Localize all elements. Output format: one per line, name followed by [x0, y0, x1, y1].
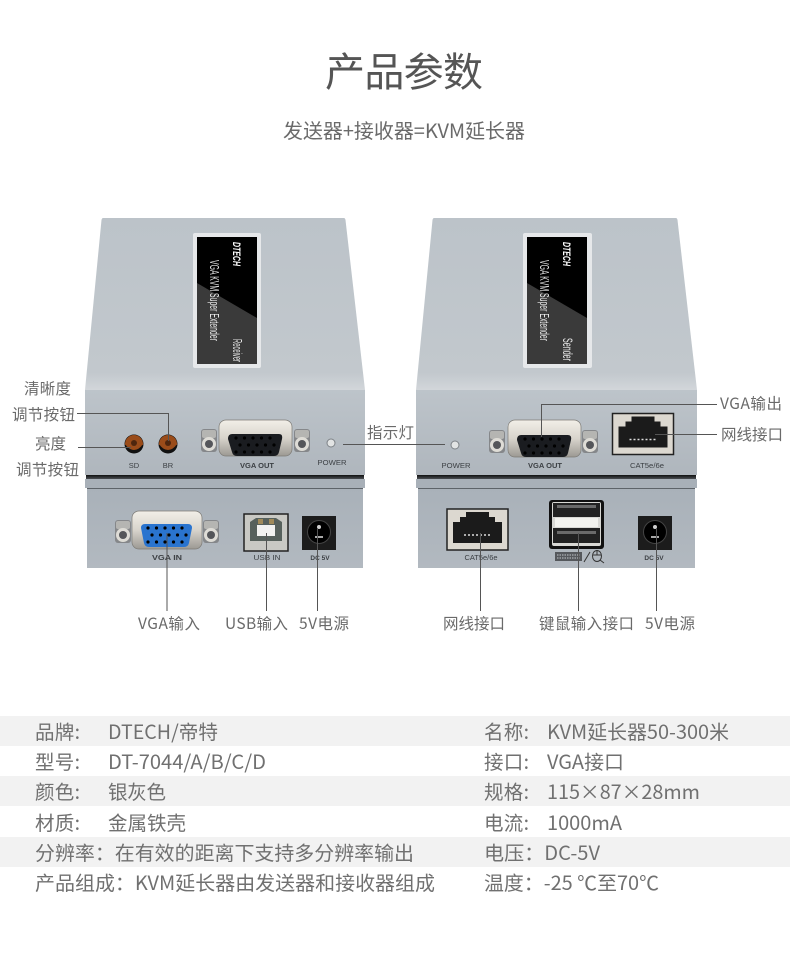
callout: network port (back): 网线接口	[443, 612, 505, 634]
row 6	[35, 867, 659, 896]
RJ45 port	[612, 414, 674, 470]
sender top face	[416, 218, 697, 390]
callout: 5V power sender	[645, 528, 695, 634]
callout: network port (back)	[443, 533, 505, 634]
callout: keyboard mouse input: 键鼠输入接口	[539, 612, 634, 634]
subtitle: 发送器+接收器=KVM延长器	[283, 115, 525, 144]
row 3: 规格:	[484, 776, 529, 805]
row 5: 电压：DC-5V	[484, 837, 601, 866]
sender unit	[416, 218, 697, 568]
row 2: DT-7044/A/B/C/D	[108, 746, 266, 775]
callout: brightness adjust button: 调节按钮	[16, 458, 79, 480]
VGA out port: VGA OUT	[528, 461, 562, 470]
callout: sharpness adjust button: 调节按钮	[12, 403, 75, 425]
RJ45 port	[447, 509, 508, 562]
row 2: 型号:	[35, 746, 80, 775]
callout: 5V power receiver: 5V电源	[299, 612, 349, 634]
row 4	[35, 807, 622, 836]
receiver unit	[85, 218, 365, 568]
callout: network port (front): 网线接口	[721, 423, 783, 445]
callout: keyboard mouse input	[539, 533, 634, 634]
DC 5V jack	[638, 516, 672, 562]
callout: indicator light	[343, 421, 445, 444]
row 1: KVM延长器50-300米	[547, 716, 729, 745]
knob: BR	[158, 434, 178, 470]
callout: VGA output	[542, 392, 782, 437]
row 3: 115×87×28mm	[547, 776, 700, 805]
row 3: 银灰色	[108, 776, 166, 805]
row 6: 产品组成：KVM延长器由发送器和接收器组成	[35, 867, 435, 896]
callout: USB input: USB输入	[225, 612, 288, 634]
callout: sharpness adjust button: 清晰度	[24, 377, 71, 399]
callout: network port (front)	[655, 423, 783, 445]
sender label plate	[523, 233, 592, 368]
DC 5V jack: DC 5V	[644, 555, 664, 562]
callout: brightness adjust button: 亮度	[35, 432, 66, 454]
callout: VGA input: VGA输入	[138, 612, 200, 634]
sender label plate: VGA KVM Super Extender	[537, 260, 552, 341]
row 3	[35, 776, 700, 805]
USB in port	[244, 514, 288, 562]
callout: VGA output: VGA输出	[720, 392, 782, 414]
title: 产品参数	[325, 40, 483, 98]
knob: SD: SD	[129, 461, 140, 470]
receiver top face	[85, 218, 365, 390]
power LED: POWER	[442, 461, 471, 470]
DC 5V jack: DC 5V	[310, 555, 330, 562]
callout: USB input	[225, 533, 288, 634]
callout: 5V power receiver	[299, 528, 349, 634]
row 5	[35, 837, 601, 866]
knob: BR: BR	[163, 461, 174, 470]
sender back housing	[416, 479, 697, 488]
row 2: 接口:	[484, 746, 529, 775]
receiver front panel	[85, 390, 365, 475]
spec table	[0, 716, 790, 896]
knob: SD	[124, 434, 144, 470]
callout: sharpness adjust button	[12, 377, 168, 441]
row 2	[35, 746, 624, 775]
sender label plate: DTECH	[560, 242, 572, 267]
row 4: 1000mA	[547, 807, 622, 836]
row 4: 材质:	[35, 807, 80, 836]
callout: VGA input	[138, 533, 200, 634]
RJ45 port: CAT5e/6e	[630, 461, 664, 470]
row 1: 名称:	[484, 716, 529, 745]
sender label plate: Sender	[560, 338, 576, 361]
callout: indicator light: 指示灯	[367, 421, 414, 443]
power LED: POWER	[318, 458, 347, 467]
VGA out port: VGA OUT	[240, 461, 274, 470]
keyboard and mouse icons	[555, 550, 604, 563]
VGA out port	[489, 420, 598, 470]
row 1: DTECH/帝特	[108, 716, 218, 745]
row 5: 分辨率：在有效的距离下支持多分辨率输出	[35, 837, 414, 866]
receiver label plate: VGA KVM Super Extender	[207, 260, 222, 341]
sender back panel	[418, 488, 695, 568]
row 6: 温度：-25 ℃至70℃	[484, 867, 659, 896]
sender front panel	[416, 390, 697, 475]
DC 5V jack	[302, 516, 336, 562]
row 2: VGA接口	[547, 746, 624, 775]
callout: brightness adjust button	[16, 432, 131, 480]
receiver label plate: DTECH	[230, 242, 242, 267]
row 3: 颜色:	[35, 776, 80, 805]
receiver label plate: Receiver	[230, 339, 245, 362]
row 1: 品牌:	[35, 716, 80, 745]
VGA out port	[201, 420, 310, 470]
VGA in port: VGA IN	[152, 553, 182, 562]
VGA in port	[115, 511, 219, 562]
USB in port: USB IN	[254, 553, 280, 562]
USB A ports	[549, 500, 604, 549]
callout: 5V power sender: 5V电源	[645, 612, 695, 634]
receiver back panel	[87, 488, 363, 568]
row 4: 电流:	[484, 807, 529, 836]
receiver label plate	[193, 233, 261, 368]
receiver back housing	[85, 479, 365, 488]
power LED	[442, 441, 471, 470]
power LED	[318, 439, 347, 467]
RJ45 port: CAT5e/6e	[464, 553, 498, 562]
row 4: 金属铁壳	[108, 807, 186, 836]
row 1	[35, 716, 729, 745]
